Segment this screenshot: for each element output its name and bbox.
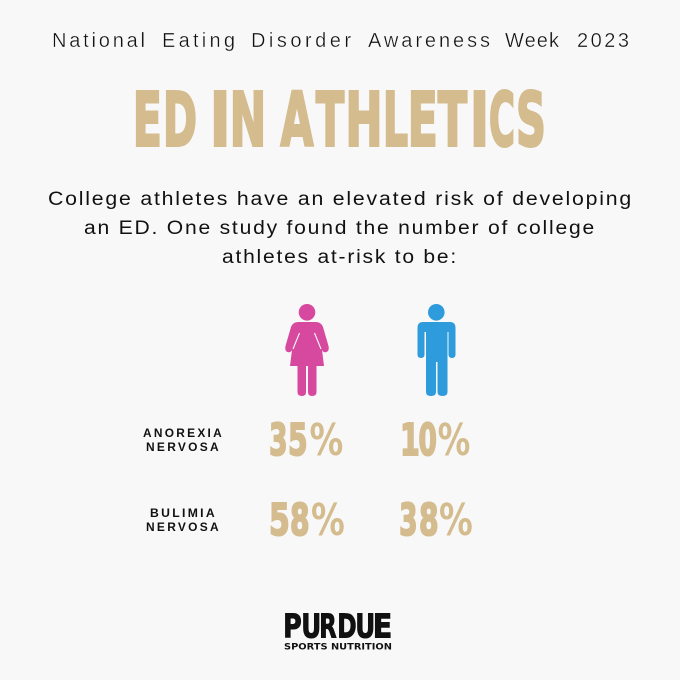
- heading: awareness week: [52, 30, 629, 52]
- heading: awareness week: Week: [505, 30, 560, 52]
- icon: female figure: [285, 304, 329, 396]
- stat: anorexia female 35%: 5: [288, 415, 308, 466]
- logo: Purdue Sports Nutrition: U: [301, 606, 321, 646]
- title: E: [133, 78, 162, 164]
- intro text block: College athletes have an elevated risk of developing: [48, 189, 633, 210]
- stat: anorexia female 35%: 3: [269, 415, 288, 466]
- intro text block: an ED. One study found the number of college: [84, 218, 596, 239]
- logo: Purdue Sports Nutrition: R: [319, 606, 337, 646]
- heading: awareness week: National: [52, 30, 145, 52]
- row label: anorexia nervosa: ANOREXIA: [143, 428, 224, 440]
- heading: awareness week: 2023: [577, 30, 629, 52]
- title: [133, 78, 546, 164]
- stat: bulimia female 58%: [269, 495, 345, 546]
- title: T: [438, 78, 467, 164]
- row label: bulimia nervosa: BULIMIA: [150, 508, 217, 520]
- title: D: [163, 78, 197, 164]
- row label: anorexia nervosa: [143, 428, 224, 454]
- stat: anorexia male 10%: [400, 415, 470, 466]
- title: I: [470, 78, 489, 164]
- title: T: [316, 78, 344, 164]
- logo: Purdue Sports Nutrition: U: [355, 606, 375, 646]
- logo: Purdue Sports Nutrition: [283, 606, 392, 652]
- stat: bulimia male 38%: [399, 495, 473, 546]
- heading: awareness week: Awareness: [368, 30, 490, 52]
- stat: bulimia male 38%: %: [439, 495, 473, 546]
- stat: anorexia female 35%: %: [310, 415, 343, 466]
- stat: bulimia female 58%: 5: [269, 495, 290, 546]
- logo: Purdue Sports Nutrition: SPORTS NUTRITION: [284, 642, 392, 652]
- heading: awareness week: Disorder: [251, 30, 351, 52]
- title: I: [210, 78, 230, 164]
- title: H: [346, 78, 382, 164]
- logo: Purdue Sports Nutrition: D: [337, 606, 357, 646]
- stat: bulimia female 58%: %: [311, 495, 345, 546]
- stat: anorexia male 10%: %: [438, 415, 470, 466]
- stat: bulimia male 38%: 8: [419, 495, 439, 546]
- row label: bulimia nervosa: [146, 508, 221, 534]
- intro text block: [48, 189, 633, 268]
- heading: awareness week: Eating: [162, 30, 235, 52]
- title: S: [516, 78, 546, 164]
- icon: male figure: [418, 304, 456, 396]
- logo: Purdue Sports Nutrition: P: [283, 606, 302, 646]
- stat: anorexia male 10%: 0: [418, 415, 437, 466]
- stat: anorexia male 10%: 1: [400, 415, 420, 466]
- row label: bulimia nervosa: NERVOSA: [146, 522, 221, 534]
- stat: anorexia female 35%: [269, 415, 343, 466]
- stat: bulimia female 58%: 8: [290, 495, 310, 546]
- title: N: [230, 78, 266, 164]
- stat: bulimia male 38%: 3: [399, 495, 418, 546]
- title: L: [383, 78, 408, 164]
- logo: Purdue Sports Nutrition: E: [373, 606, 392, 646]
- title: E: [408, 78, 438, 164]
- row label: anorexia nervosa: NERVOSA: [146, 442, 221, 454]
- title: A: [281, 78, 313, 164]
- title: C: [489, 78, 515, 164]
- intro text block: athletes at-risk to be:: [222, 247, 458, 268]
